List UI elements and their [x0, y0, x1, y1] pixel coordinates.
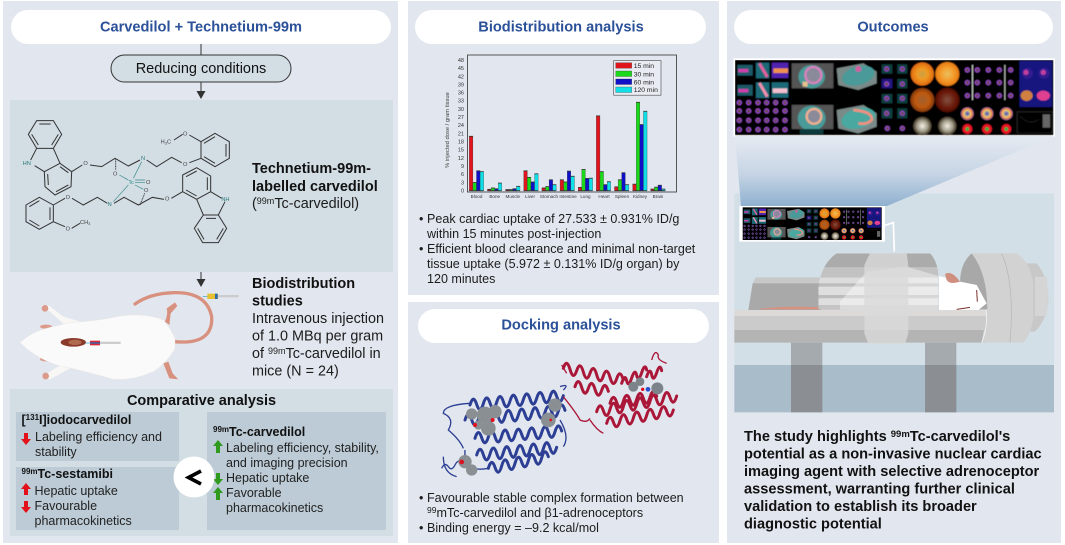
bar chart: injected dose per gram tissue: 42: [458, 74, 464, 80]
bar chart: injected dose per gram tissue: 18: [458, 140, 464, 146]
arrow: molecule to biodistribution: [196, 272, 206, 287]
bar chart: injected dose per gram tissue: 15: [458, 148, 464, 154]
bar chart: injected dose per gram tissue: Spleen: [615, 194, 630, 199]
bar chart: injected dose per gram tissue: Blood: [471, 194, 483, 199]
text: biodistribution studies: 99m: [268, 346, 286, 356]
box: 99mTc-carvedilol: Labeling efficiency, stability,: [226, 441, 379, 455]
legend: time points: 60 min: [634, 80, 654, 86]
bar chart: injected dose per gram tissue: Stomach: [540, 194, 559, 199]
box: iodocarvedilol: [: [22, 413, 26, 427]
chemical structure: technetium-99m carvedilol: O: [66, 195, 71, 201]
chemical structure: technetium-99m carvedilol: NH: [221, 197, 230, 203]
box: sestamibi: Hepatic uptake: [34, 484, 118, 498]
chemical structure: technetium-99m carvedilol: O: [183, 162, 188, 168]
bar chart: injected dose per gram tissue: 12: [458, 156, 464, 162]
text: conclusion: validation to establish its broader: [744, 499, 977, 515]
heading: Carvedilol + Technetium-99m: [11, 10, 391, 44]
heading: outcomes: Outcomes: [857, 20, 929, 36]
bar chart: injected dose per gram tissue: 33: [458, 99, 464, 105]
bar chart: injected dose per gram tissue: Bone: [489, 194, 501, 199]
bar chart: injected dose per gram tissue: Muscle: [506, 194, 521, 199]
text: docking findings: •: [419, 491, 423, 505]
heading: outcomes: [734, 10, 1053, 44]
text: technetium-99m-labelled carvedilol: (: [252, 196, 257, 212]
box: 99mTc-carvedilol: Hepatic uptake: [226, 471, 309, 485]
text: conclusion: potential as a non-invasive nuclear cardiac: [744, 446, 1042, 462]
text: biodistribution findings: 120 minutes: [427, 272, 495, 286]
bar chart: injected dose per gram tissue: 39: [458, 82, 464, 88]
bar chart: injected dose per gram tissue: Intestine: [559, 194, 577, 199]
heading: Carvedilol + Technetium-99m: Carvedilol + Technetium-99m: [100, 20, 302, 36]
text: conclusion: assessment, warranting further clinical: [744, 482, 1015, 498]
text: biodistribution studies: Biodistribution: [252, 276, 355, 292]
text: conclusion: [744, 429, 1042, 532]
box: iodocarvedilol: stability: [35, 445, 77, 459]
heading: biodistribution analysis: [415, 10, 706, 44]
illustration: scanner with projection beam: [734, 136, 1054, 412]
text: conclusion: imaging agent with selective adrenoceptor: [744, 464, 1040, 480]
bar chart: injected dose per gram tissue: 9: [461, 164, 464, 170]
text: technetium-99m-labelled carvedilol: 99m: [257, 196, 274, 206]
chemical structure: technetium-99m carvedilol: 3: [88, 221, 91, 226]
panel: docking analysis: [408, 302, 719, 543]
panel: biodistribution analysis: [408, 1, 719, 295]
text: biodistribution findings: •: [419, 242, 423, 256]
text: docking findings: mTc-carvedilol and β1-adrenoceptors: [436, 506, 643, 520]
text: biodistribution findings: [419, 212, 696, 286]
comparison symbol: less than: [174, 456, 214, 498]
bar chart: injected dose per gram tissue: 27: [458, 115, 464, 121]
box: 99mTc-carvedilol: [207, 412, 386, 530]
text: biodistribution studies: of 1.0 MBq per gram: [252, 328, 383, 344]
box: sestamibi: pharmacokinetics: [34, 514, 132, 528]
bar chart: injected dose per gram tissue: 21: [458, 131, 464, 137]
box: sestamibi: 99m: [22, 467, 38, 476]
heading: biodistribution analysis: Biodistribution analysis: [478, 20, 644, 36]
bar chart: injected dose per gram tissue: 6: [461, 172, 464, 178]
bar chart: injected dose per gram tissue: 30: [458, 107, 464, 113]
box: iodocarvedilol: 131: [26, 413, 40, 422]
bar chart: injected dose per gram tissue: 45: [458, 66, 464, 72]
text: conclusion: 99m: [891, 429, 910, 440]
box: 99mTc-carvedilol: Favorable: [226, 486, 282, 500]
bar chart: injected dose per gram tissue: Kidney: [633, 194, 648, 199]
bar chart: injected dose per gram tissue: Lung: [580, 194, 591, 199]
box: 99mTc-carvedilol: 99m: [213, 425, 229, 434]
box: sestamibi: Tc-sestamibi: [38, 467, 113, 481]
bar chart: injected dose per gram tissue: 36: [458, 91, 464, 97]
text: technetium-99m-labelled carvedilol: Technetium-99m-: [252, 161, 371, 177]
step: reducing conditions: Reducing conditions: [136, 61, 266, 77]
text: conclusion: Tc-carvedilol's: [910, 429, 1010, 445]
text: conclusion: diagnostic potential: [744, 516, 882, 532]
text: biodistribution findings: tissue uptake (5.972 ± 0.131% ID/g organ) by: [427, 257, 680, 271]
text: docking findings: 99: [427, 505, 437, 515]
panel: outcomes: [727, 1, 1061, 543]
text: biodistribution studies: studies: [252, 294, 303, 310]
legend: time points: 15 min: [634, 63, 654, 70]
heading: comparative analysis: Comparative analysis: [127, 393, 276, 409]
chemical structure: technetium-99m carvedilol: O: [113, 171, 118, 177]
chemical structure: technetium-99m carvedilol: O: [183, 131, 188, 137]
chemical structure: technetium-99m carvedilol: 3: [165, 140, 168, 145]
heading: docking analysis: Docking analysis: [501, 318, 621, 334]
bar chart: injected dose per gram tissue: [445, 55, 676, 199]
chemical structure: technetium-99m carvedilol: [23, 121, 230, 243]
bar chart: injected dose per gram tissue: Heart: [598, 194, 610, 199]
step: reducing conditions: [111, 55, 291, 82]
chemical structure: technetium-99m carvedilol: O: [146, 180, 151, 186]
box: iodocarvedilol: [16, 412, 179, 461]
text: biodistribution findings: within 15 minutes post-injection: [426, 227, 601, 241]
text: biodistribution studies: mice (N = 24): [252, 364, 339, 380]
text: docking findings: Favourable stable complex formation between: [427, 491, 684, 505]
bar chart: injected dose per gram tissue: Liver: [525, 194, 535, 199]
bar chart: injected dose per gram tissue: 48: [458, 58, 464, 64]
panel: synthesis and comparison (left column): [3, 1, 398, 543]
panel: comparative analysis: [10, 389, 393, 536]
bar chart: injected dose per gram tissue: 0: [461, 188, 464, 194]
chemical structure: technetium-99m carvedilol: N: [108, 202, 112, 208]
chemical structure: technetium-99m carvedilol: C: [167, 139, 171, 145]
text: docking findings: Binding energy = –9.2 kcal/mol: [427, 521, 599, 535]
chemical structure: technetium-99m carvedilol: Tc: [128, 180, 134, 186]
legend: time points: 120 min: [634, 87, 658, 94]
text: technetium-99m-labelled carvedilol: labelled carvedilol: [252, 179, 378, 195]
box: 99mTc-carvedilol: Tc-carvedilol: [229, 425, 305, 439]
box: iodocarvedilol: Labeling efficiency and: [35, 430, 162, 444]
text: biodistribution studies: Intravenous injection: [252, 311, 384, 327]
text: biodistribution findings: •: [419, 212, 423, 226]
box: 99mTc-carvedilol: pharmacokinetics: [226, 501, 323, 515]
bar chart: injected dose per gram tissue: 3: [461, 180, 464, 186]
chemical structure: technetium-99m carvedilol: O: [83, 161, 88, 167]
chemical structure: technetium-99m carvedilol: H: [161, 139, 165, 145]
text: technetium-99m-labelled carvedilol: Tc-carvedilol): [274, 196, 359, 212]
text: conclusion: The study highlights: [744, 429, 891, 445]
heading: docking analysis: [418, 309, 709, 343]
chemical structure: technetium-99m carvedilol: CH: [80, 220, 88, 226]
text: docking findings: [419, 491, 684, 535]
chemical structure: technetium-99m carvedilol: N: [141, 156, 145, 162]
bar chart: injected dose per gram tissue: 24: [458, 123, 464, 129]
text: docking findings: •: [419, 521, 423, 535]
bar chart: injected dose per gram tissue: Brain: [653, 194, 664, 199]
chemical structure: technetium-99m carvedilol: O: [165, 197, 170, 203]
illustration: mouse with injection: [20, 293, 239, 380]
legend: time points: [614, 61, 661, 95]
chemical structure: technetium-99m carvedilol: O: [66, 227, 71, 233]
text: biodistribution findings: Efficient blood clearance and minimal non-target: [427, 242, 696, 256]
legend: time points: 30 min: [634, 72, 654, 78]
chemical structure: technetium-99m carvedilol: HN: [23, 161, 31, 167]
panel: molecule: [10, 100, 393, 272]
text: biodistribution studies: Tc-carvedilol in: [286, 346, 381, 362]
box: 99mTc-carvedilol: and imaging precision: [226, 456, 348, 470]
chemical structure: technetium-99m carvedilol: O: [144, 188, 149, 194]
illustration: docked protein complex: [442, 353, 677, 477]
box: iodocarvedilol: I]iodocarvedilol: [39, 413, 131, 427]
box: sestamibi: Favourable: [34, 499, 97, 513]
nuclear imaging scans: [733, 58, 1055, 137]
arrow: heading to reducing conditions: [200, 44, 202, 55]
bar chart: injected dose per gram tissue: % injected dose / gram tissue: [445, 92, 451, 168]
arrow: reducing conditions to molecule: [196, 82, 206, 99]
box: sestamibi: [16, 467, 179, 530]
text: biodistribution findings: Peak cardiac uptake of 27.533 ± 0.931% ID/g: [427, 212, 679, 226]
text: biodistribution studies: of: [252, 346, 268, 362]
